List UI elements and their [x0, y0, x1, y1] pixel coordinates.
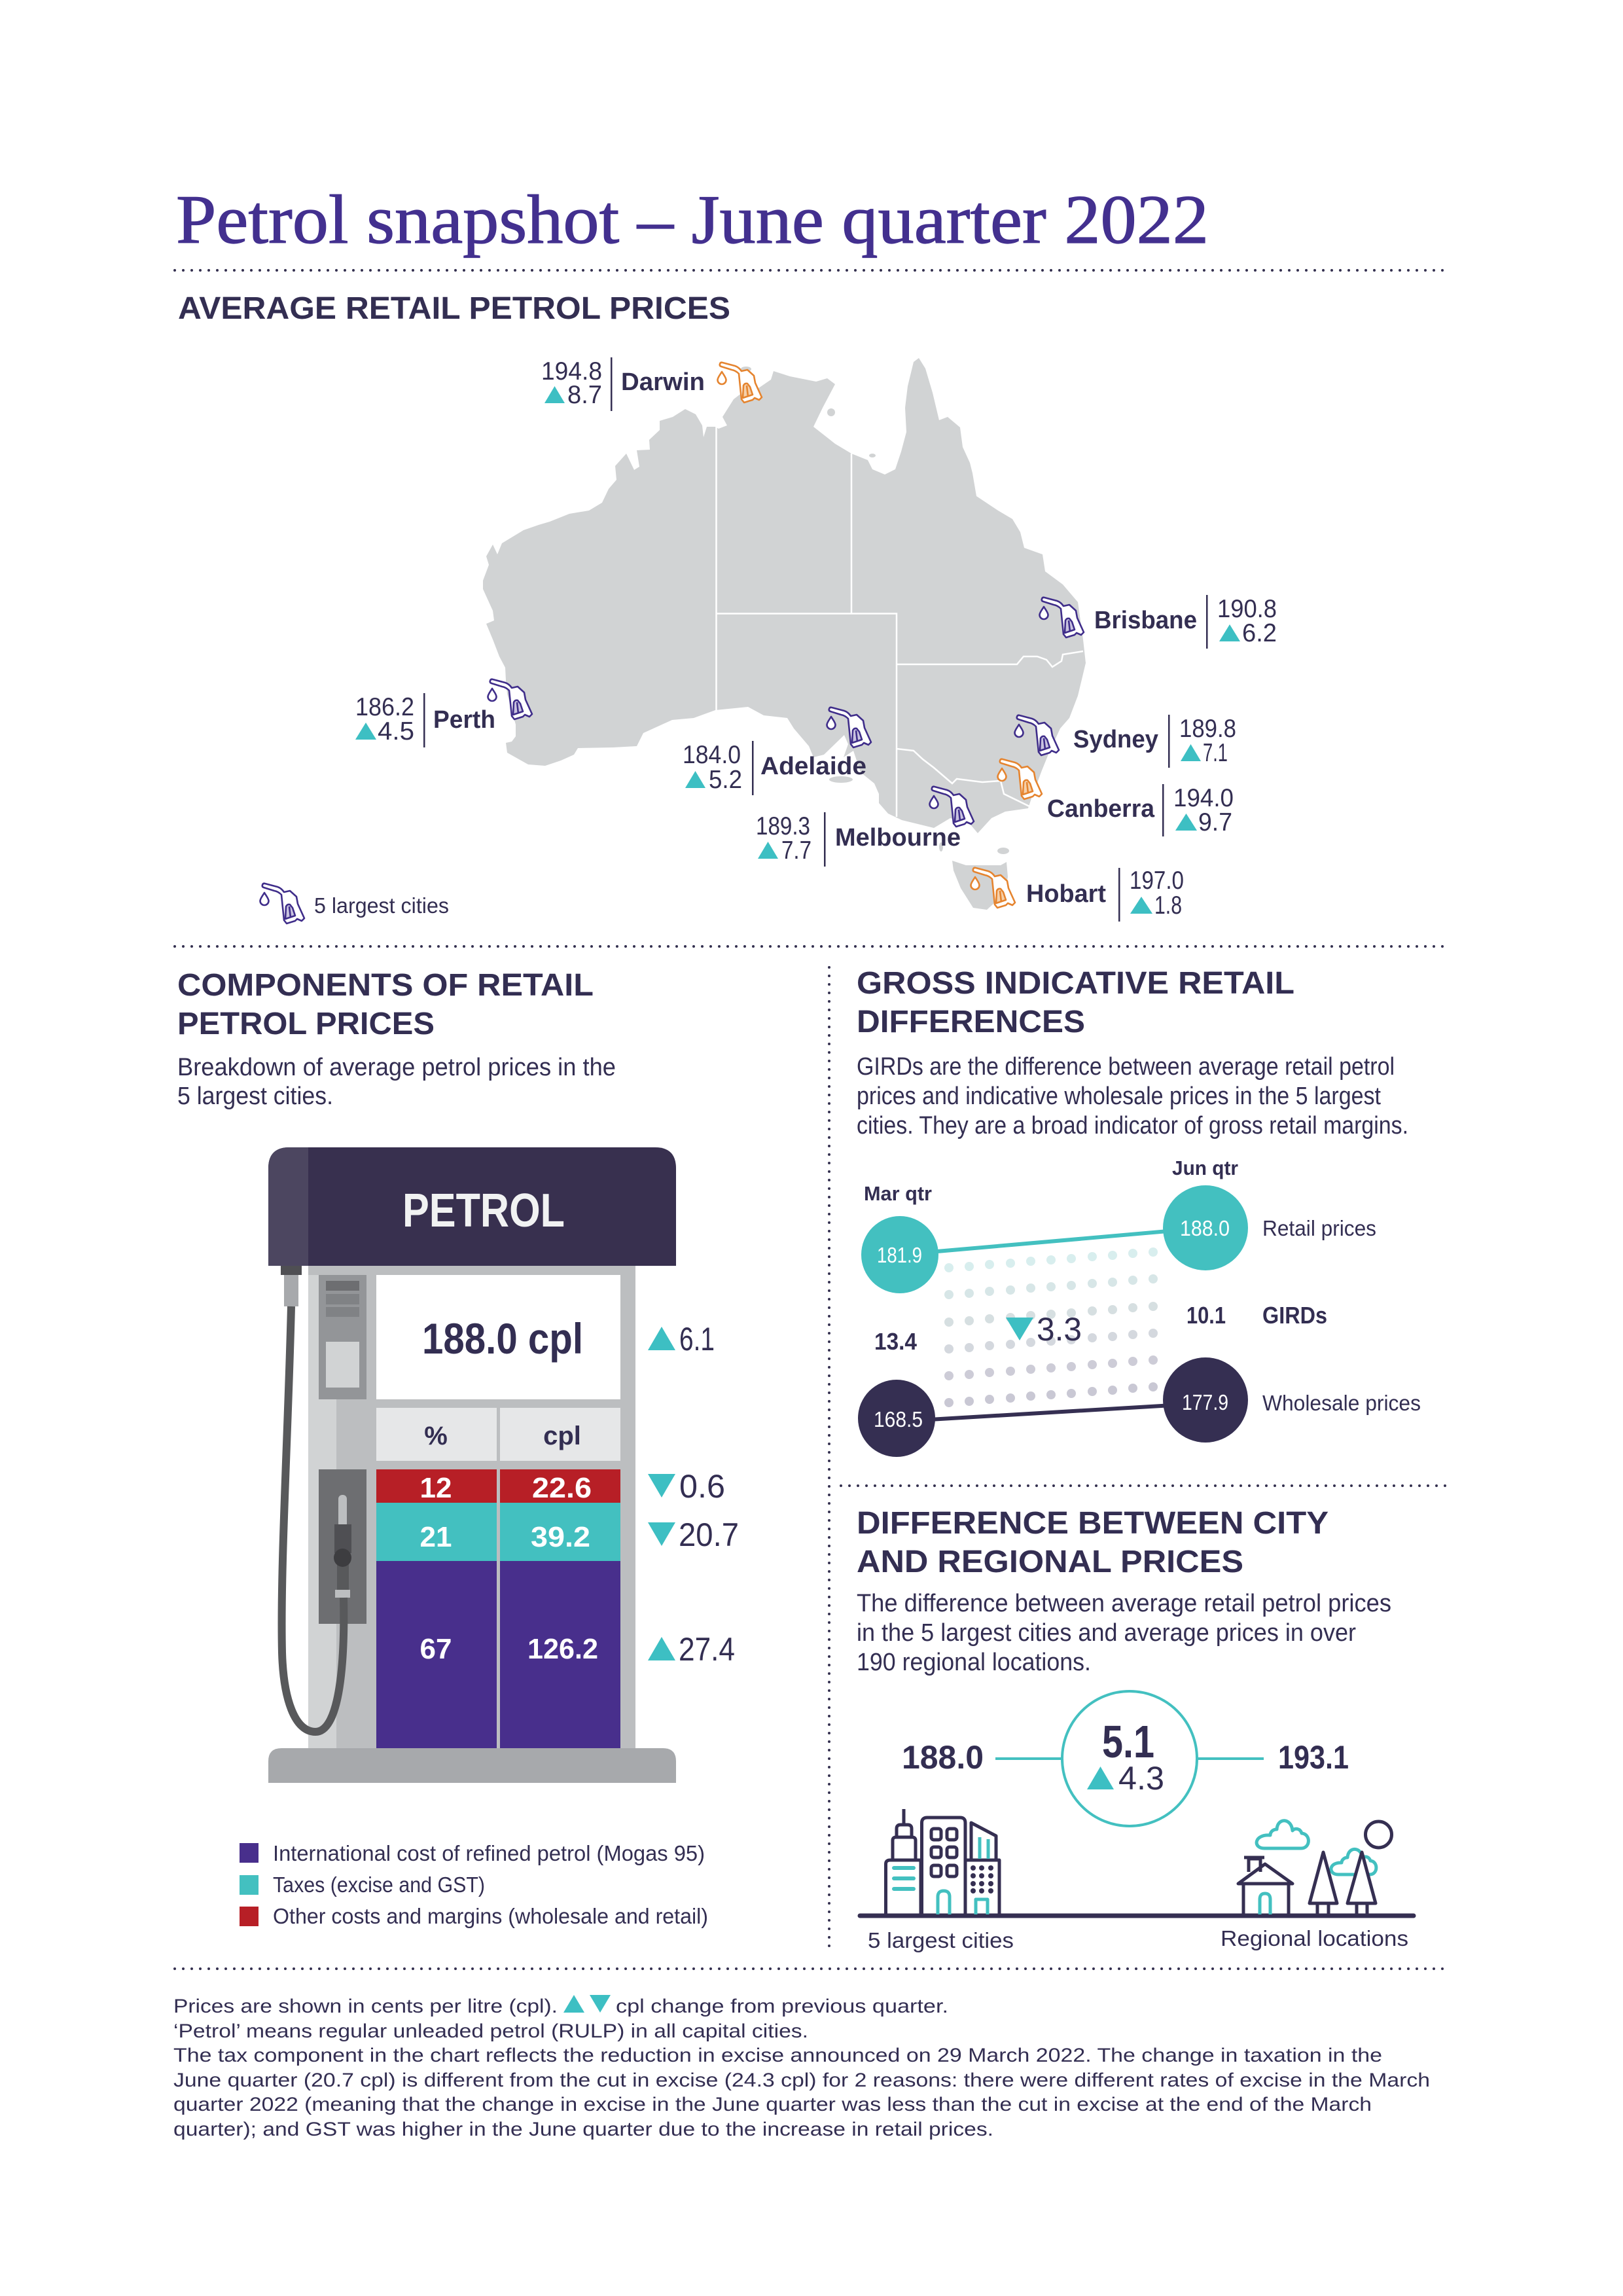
- label: regional locations: Regional locations: [1221, 1926, 1408, 1950]
- legend: 5 largest cities: 5 largest cities: [314, 893, 449, 918]
- label: Adelaide: Adelaide: [760, 753, 866, 780]
- legend: components: Other costs and margins (wholesale and retail): [273, 1904, 708, 1928]
- label: Hobart: 1.8: [1154, 891, 1182, 920]
- label: Darwin: Darwin: [621, 368, 705, 396]
- footnotes: ‘Petrol’ means regular unleaded petrol (RULP) in all capital cities.: [173, 2020, 808, 2042]
- row: international cost: 67: [420, 1633, 452, 1665]
- label: Darwin: 194.8: [541, 357, 602, 386]
- label: Hobart: 197.0: [1130, 867, 1184, 895]
- table header: [376, 1408, 620, 1461]
- text block: city and regional description: The difference between average retail petrol prices: [857, 1590, 1391, 1617]
- GIRD values: 13.4: [874, 1328, 917, 1355]
- icon: Adelaide fuel nozzle: [827, 708, 871, 747]
- difference callout: [902, 1691, 1349, 1826]
- row: other costs and margins: 22.6: [532, 1472, 592, 1504]
- pump base: [268, 1748, 676, 1783]
- wholesale price line: 168.5: [874, 1407, 923, 1431]
- label: Darwin: [541, 357, 705, 411]
- title: Petrol snapshot – June quarter 2022: [176, 181, 1209, 258]
- label: Sydney: Sydney: [1073, 726, 1158, 753]
- text block: city and regional description: 190 regional locations.: [857, 1649, 1091, 1676]
- heading: GIRDs: GROSS INDICATIVE RETAIL: [857, 966, 1294, 1001]
- label: Brisbane: [1094, 595, 1277, 649]
- label: Hobart: [1026, 867, 1184, 922]
- panel: components of retail petrol prices: [177, 968, 739, 1928]
- text block: city and regional description: [857, 1590, 1391, 1676]
- label: Sydney: [1073, 715, 1236, 768]
- row: taxes: 21: [420, 1521, 452, 1553]
- wholesale price line: 177.9: [1182, 1390, 1228, 1414]
- footnotes: quarter); and GST was higher in the June quarter due to the increase in retail prices.: [173, 2119, 993, 2140]
- icon: Canberra fuel nozzle: [997, 759, 1042, 799]
- icon: Hobart fuel nozzle: [971, 868, 1015, 908]
- map of Australia: [483, 358, 1086, 910]
- label: Darwin: 8.7: [567, 381, 602, 409]
- change: taxes: 20.7: [679, 1516, 739, 1553]
- change: other costs: 0.6: [679, 1468, 725, 1505]
- row: other costs and margins: [376, 1469, 620, 1504]
- row: international cost: 126.2: [527, 1633, 598, 1665]
- label: Adelaide: 184.0: [683, 741, 741, 769]
- column labels: Mar qtr: [864, 1182, 932, 1205]
- wholesale price line: [858, 1357, 1248, 1457]
- legend: components: International cost of refined petrol (Mogas 95): [273, 1841, 705, 1865]
- label: Perth: 4.5: [378, 717, 414, 745]
- change: international cost: [648, 1631, 735, 1668]
- label: Canberra: Canberra: [1047, 795, 1155, 823]
- heading line 2: city and regional: AND REGIONAL PRICES: [857, 1545, 1243, 1579]
- change: total: 6.1: [679, 1321, 715, 1357]
- table header: %: [424, 1422, 448, 1450]
- row: taxes: [376, 1503, 620, 1561]
- pump canopy: PETROL: [402, 1185, 565, 1237]
- change: total: [648, 1321, 715, 1357]
- GIRD change: [1006, 1311, 1082, 1348]
- change: taxes: [648, 1516, 739, 1553]
- GIRD values: [874, 1302, 1327, 1355]
- panel: gross indicative retail differences: [857, 966, 1421, 1457]
- label: Hobart: Hobart: [1026, 880, 1106, 908]
- icon: Brisbane fuel nozzle: [1039, 598, 1084, 637]
- footnotes: June quarter (20.7 cpl) is different from the cut in excise (24.3 cpl) for 2 reasons: there were different rates of excise in the March: [173, 2070, 1430, 2091]
- pump keypad panel: [319, 1275, 366, 1399]
- dotted gap: [944, 1247, 1158, 1407]
- footnotes: [173, 1995, 1430, 2140]
- text block: city and regional description: in the 5 largest cities and average prices in over: [857, 1619, 1356, 1647]
- legend: components: [240, 1841, 708, 1928]
- heading: components: COMPONENTS OF RETAIL: [177, 968, 594, 1003]
- retail price line: 181.9: [877, 1243, 922, 1267]
- label: Perth: Perth: [433, 706, 495, 734]
- label: Canberra: [1047, 784, 1234, 836]
- GIRD chart: [858, 1157, 1421, 1457]
- label: Brisbane: Brisbane: [1094, 607, 1197, 634]
- GIRD change: 3.3: [1037, 1311, 1082, 1348]
- row: other costs and margins: 12: [420, 1472, 452, 1504]
- legend: components: Taxes (excise and GST): [273, 1873, 485, 1897]
- icon: Darwin fuel nozzle: [717, 363, 762, 403]
- difference callout: 5.1: [1102, 1716, 1154, 1767]
- legend: 5 largest cities: [260, 884, 449, 924]
- difference callout: 188.0: [902, 1739, 984, 1776]
- text block: components description: [177, 1054, 616, 1110]
- label: Sydney: 189.8: [1179, 715, 1236, 743]
- heading line 2: GIRDs: DIFFERENCES: [857, 1005, 1085, 1039]
- row: international cost: [376, 1561, 620, 1748]
- text block: GIRDs description: [857, 1053, 1408, 1139]
- table header: cpl: [543, 1422, 581, 1450]
- text block: GIRDs description: prices and indicative wholesale prices in the 5 largest: [857, 1083, 1381, 1110]
- series labels: Retail prices: [1262, 1216, 1376, 1240]
- retail price line: 188.0: [1180, 1216, 1230, 1240]
- panel: average retail petrol prices: [178, 291, 1277, 924]
- petrol pump chart: [268, 1147, 739, 1783]
- label: Perth: [355, 693, 495, 747]
- panel: difference between city and regional prices: [857, 1506, 1414, 1952]
- text block: GIRDs description: GIRDs are the difference between average retail petrol: [857, 1053, 1395, 1081]
- label: Melbourne: [756, 812, 961, 867]
- hose: [281, 1266, 344, 1732]
- difference callout: 193.1: [1278, 1739, 1349, 1776]
- total price display: 188.0 cpl: [422, 1314, 583, 1363]
- GIRD values: GIRDs: [1262, 1302, 1327, 1329]
- text block: components description: Breakdown of average petrol prices in the: [177, 1054, 616, 1081]
- column labels: Jun qtr: [1172, 1157, 1238, 1179]
- change: international cost: 27.4: [679, 1631, 735, 1668]
- label: Adelaide: [683, 741, 866, 795]
- label: Melbourne: 189.3: [756, 812, 810, 840]
- label: Adelaide: 5.2: [709, 766, 742, 794]
- footnotes: Prices are shown in cents per litre (cpl).: [173, 1996, 558, 2017]
- icon: Melbourne fuel nozzle: [929, 787, 974, 827]
- series labels: [1262, 1216, 1421, 1415]
- pump body: [308, 1265, 635, 1748]
- label: Melbourne: Melbourne: [835, 824, 961, 852]
- total price display: [376, 1275, 620, 1399]
- retail price line: [861, 1185, 1248, 1293]
- label: Brisbane: 190.8: [1217, 595, 1277, 623]
- heading line 2: components: PETROL PRICES: [177, 1007, 435, 1041]
- label: 5 largest cities: 5 largest cities: [868, 1928, 1014, 1952]
- row: taxes: 39.2: [531, 1521, 590, 1553]
- heading: average retail petrol prices: AVERAGE RETAIL PETROL PRICES: [178, 291, 730, 326]
- label: Sydney: 7.1: [1203, 739, 1228, 767]
- text block: components description: 5 largest cities.: [177, 1083, 333, 1110]
- text block: GIRDs description: cities. They are a broad indicator of gross retail margins.: [857, 1112, 1408, 1139]
- label: Brisbane: 6.2: [1242, 619, 1277, 647]
- pump canopy: [268, 1147, 676, 1266]
- change: other costs: [648, 1468, 725, 1505]
- heading: city and regional: DIFFERENCE BETWEEN CITY: [857, 1506, 1329, 1541]
- icon: city buildings: [886, 1809, 999, 1916]
- GIRD values: 10.1: [1186, 1302, 1226, 1329]
- ground line: [860, 1914, 1414, 1918]
- difference callout: 4.3: [1118, 1760, 1164, 1797]
- footnotes: The tax component in the chart reflects the reduction in excise announced on 29 March 2022. The change in taxation in the: [173, 2045, 1382, 2066]
- nozzle holder: [319, 1469, 366, 1624]
- label: Canberra: 9.7: [1198, 808, 1232, 836]
- icon: Sydney fuel nozzle: [1014, 715, 1059, 755]
- footnotes: quarter 2022 (meaning that the change in excise in the June quarter was less than the cut in excise at the end of the March: [173, 2094, 1372, 2115]
- column labels: [864, 1157, 1238, 1205]
- icon: Perth fuel nozzle: [488, 679, 532, 719]
- label: Melbourne: 7.7: [781, 836, 812, 865]
- label: Perth: 186.2: [355, 693, 414, 721]
- footnotes: cpl change from previous quarter.: [616, 1996, 948, 2017]
- label: Canberra: 194.0: [1173, 784, 1234, 812]
- icon: regional landscape: [1238, 1821, 1391, 1916]
- series labels: Wholesale prices: [1262, 1391, 1421, 1415]
